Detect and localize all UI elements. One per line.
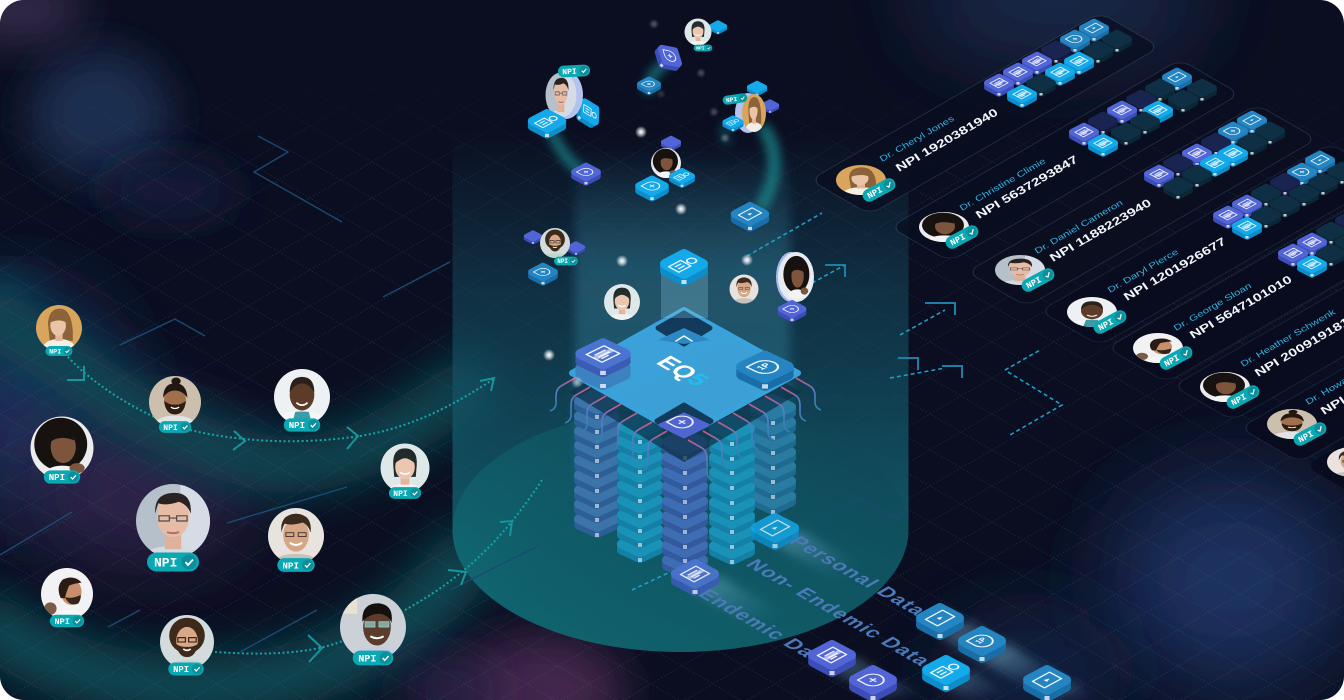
card: Dr. Heather Schwenk: Dr. Heather Schwenk bbox=[1239, 307, 1339, 369]
floating cluster: right avatar bbox=[722, 83, 777, 133]
tile: central cyan bbox=[665, 254, 703, 284]
avatar: near platform right bbox=[730, 274, 758, 304]
floating cluster: top avatar: NPI bbox=[696, 46, 705, 52]
EQ5 platform bbox=[572, 310, 798, 437]
floating cluster: right avatar: NPI bbox=[726, 96, 738, 104]
right tile with 1P pin: 1P bbox=[754, 362, 773, 371]
tile: floating device bbox=[735, 206, 765, 230]
top slot with tile bbox=[658, 313, 710, 344]
dashed connectors and corner arrows to the doctor cards bbox=[632, 213, 1062, 590]
card: Dr. Cheryl Jones: NPI 1920381940 bbox=[893, 106, 1000, 174]
stack column 1 bbox=[578, 392, 616, 537]
tile personal 1 bbox=[756, 518, 794, 548]
tile non-endemic bbox=[927, 660, 965, 690]
avatar 2: NPI bbox=[163, 424, 178, 433]
provider avatars with NPI badges bbox=[30, 305, 430, 675]
card: Dr. Daniel Cameron: Dr. Daniel Cameron bbox=[1033, 199, 1125, 256]
avatar 9 bbox=[160, 615, 214, 675]
avatar 6: NPI bbox=[282, 560, 299, 571]
avatar 9: NPI bbox=[173, 665, 189, 675]
card: Dr. Daniel Cameron bbox=[967, 104, 1317, 306]
card: Dr. Cheryl Jones: Dr. Cheryl Jones bbox=[878, 114, 956, 164]
data category labels bbox=[693, 533, 936, 671]
tile endemic 3 bbox=[854, 670, 892, 700]
card: Dr. Daryl Pierce bbox=[1040, 144, 1344, 346]
card: Dr. Daryl Pierce: NPI bbox=[1097, 317, 1115, 333]
label: Personal Data: Personal Data bbox=[784, 533, 932, 619]
avatar 3: NPI bbox=[289, 420, 305, 431]
avatar: near platform left bbox=[604, 284, 640, 320]
avatar 1 bbox=[36, 305, 82, 356]
stack column 2 bbox=[622, 418, 658, 562]
card: Dr. Christine Climie: NPI 5637293847 bbox=[973, 153, 1080, 221]
EQ5 logo: EQ5 bbox=[650, 352, 715, 390]
avatar 1: NPI bbox=[49, 348, 61, 356]
label: Non- Endemic Data: Non- Endemic Data bbox=[741, 556, 936, 669]
platform shadow and wires bbox=[550, 377, 822, 480]
card: Dr. George Sloan bbox=[1112, 210, 1344, 380]
stack column 5 bbox=[754, 398, 792, 514]
floating cluster: middle avatar bbox=[639, 138, 692, 200]
card: Dr. Ho bbox=[1246, 368, 1344, 460]
card: partial bottom row bbox=[1311, 448, 1344, 488]
card: Dr. Heather Schwenk bbox=[1178, 287, 1344, 418]
right tile with 1P pin bbox=[742, 356, 788, 389]
left stacked tile bbox=[581, 344, 625, 388]
light beam under central tile bbox=[661, 272, 708, 318]
card: Dr. Cheryl Jones bbox=[810, 12, 1160, 214]
floating cluster: lower-left avatar: NPI bbox=[557, 258, 568, 265]
avatar 5 bbox=[136, 484, 210, 572]
avatar 4 bbox=[30, 416, 94, 484]
card: Dr. Christine Climie: NPI bbox=[949, 232, 967, 248]
doctor record cards bbox=[810, 12, 1344, 500]
avatar 4: NPI bbox=[49, 472, 65, 483]
avatar 7: NPI bbox=[393, 490, 408, 499]
avatar 7 bbox=[380, 444, 430, 499]
card: Dr. Daniel Cameron: NPI bbox=[1025, 275, 1043, 291]
tile endemic 1 bbox=[676, 564, 714, 594]
floating cluster: tilted avatar with NPI bbox=[532, 64, 602, 184]
bottom slot with pin tile bbox=[657, 405, 711, 437]
label: Endemic Data: Endemic Data bbox=[693, 586, 839, 671]
card: Dr. Daniel Cameron: NPI 1188223940 bbox=[1047, 197, 1154, 264]
avatar 8 bbox=[41, 568, 93, 627]
avatar 2 bbox=[149, 376, 201, 433]
card: Dr. Ho: NPI bbox=[1297, 429, 1315, 445]
tile personal 2 bbox=[921, 608, 959, 638]
server stacks under platform bbox=[578, 392, 792, 578]
card: Dr. George Sloan: NPI bbox=[1163, 353, 1181, 369]
avatar 5: NPI bbox=[154, 556, 177, 570]
tile personal 4 bbox=[1028, 670, 1066, 700]
translucent cylinder behind the platform bbox=[450, 130, 908, 652]
card: Dr. Christine Climie bbox=[890, 60, 1240, 262]
card: Dr. Cheryl Jones: NPI bbox=[866, 185, 884, 201]
data tiles at base bbox=[813, 608, 1066, 700]
tile personal 3 bbox=[963, 631, 1001, 661]
stack column 4 bbox=[714, 420, 750, 564]
glowing particles bbox=[543, 19, 753, 388]
card: Dr. Christine Climie: Dr. Christine Climie bbox=[958, 157, 1048, 213]
card: Dr. George Sloan: Dr. George Sloan bbox=[1172, 282, 1254, 333]
dotted provider flow paths with arrows bbox=[62, 350, 542, 662]
card: Dr. Heather Schwenk: NPI bbox=[1230, 392, 1248, 408]
card: Dr. Daryl Pierce: Dr. Daryl Pierce bbox=[1106, 247, 1181, 295]
tile personal 3: 1P bbox=[973, 636, 989, 645]
floating cluster: tilted avatar with NPI: NPI bbox=[562, 68, 577, 77]
avatar 6 bbox=[268, 508, 324, 572]
tile endemic 2 bbox=[813, 645, 851, 675]
tilted avatar with tile at right bbox=[776, 252, 814, 321]
floating cluster: lower-left avatar bbox=[526, 228, 583, 284]
avatar 8: NPI bbox=[54, 617, 70, 627]
avatar 10: NPI bbox=[358, 655, 376, 666]
card: Dr. Daryl Pierce: NPI 1201926677 bbox=[1121, 235, 1228, 303]
avatar 10 bbox=[340, 594, 406, 666]
avatar 3 bbox=[274, 369, 330, 432]
floating tiles bbox=[526, 18, 814, 321]
trail beams under data tiles bbox=[695, 530, 1105, 700]
stack column 3 bbox=[666, 434, 704, 578]
teal arc ribbons around floating tiles bbox=[553, 62, 774, 205]
floating cluster: top avatar bbox=[640, 18, 725, 94]
card: Dr. George Sloan: NPI 5647101010 bbox=[1187, 273, 1294, 341]
